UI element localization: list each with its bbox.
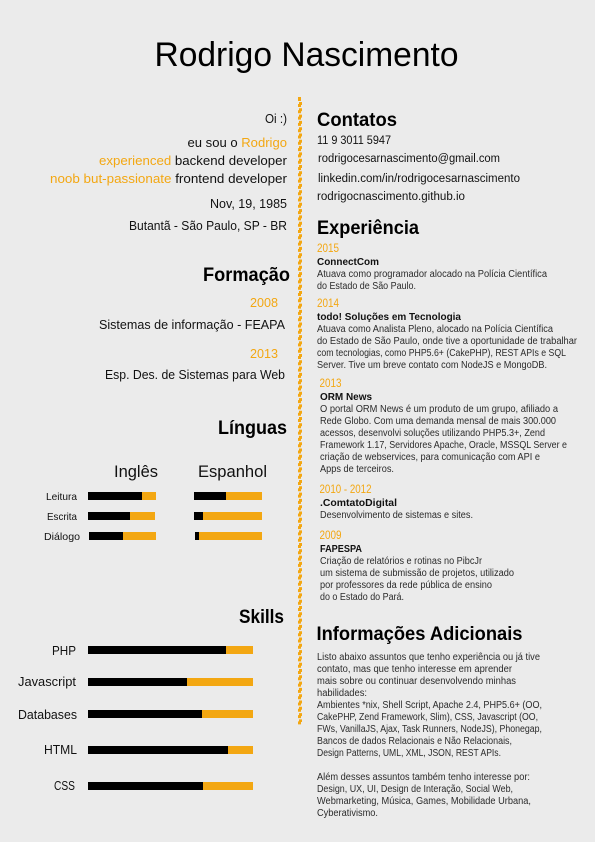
panel: informações adicionais: Cyberativismo. — [317, 808, 378, 819]
panel: informações adicionais: Listo abaixo assuntos que tenho experiência ou já tive — [317, 652, 540, 663]
job: FAPESPA: FAPESPA — [320, 543, 362, 555]
job: ORM News: Rede Globo. Com uma demanda mensal de mais 300.000 — [320, 416, 556, 427]
panel: intro — [50, 111, 288, 233]
job: FAPESPA: por professores da rede pública de ensino — [320, 580, 492, 591]
panel: intro: eu sou o Rodrigo — [188, 135, 287, 150]
panel: contatos: rodrigocesarnascimento@gmail.com — [318, 153, 500, 165]
panel: informações adicionais: Webmarketing, Música, Games, Mobilidade Urbana, — [317, 796, 531, 807]
job: ORM News: acessos, desenvolvi soluções utilizando PHP5.3+, Zend — [320, 428, 545, 439]
panel: informações adicionais: habilidades: — [317, 688, 367, 699]
job: .ComtatoDigital: 2010 - 2012 — [320, 484, 372, 496]
job: ORM News: 2013 — [320, 378, 342, 390]
panel: formação — [99, 264, 290, 382]
panel: contatos — [317, 109, 520, 203]
job: ConnectCom: Atuava como programador alocado na Polícia Científica — [317, 269, 547, 280]
bars: language levels — [88, 492, 262, 540]
job: FAPESPA: do o Estado do Pará. — [320, 592, 404, 603]
panel: informações adicionais: CakePHP, Zend Framework, Slim), CSS, Javascript (OO, — [317, 712, 538, 723]
panel: skills: Javascript — [18, 674, 76, 689]
panel: línguas: Inglês — [114, 462, 158, 481]
panel: línguas: Espanhol — [198, 462, 267, 481]
job: todo! Soluções em Tecnologia: Server. Tive um breve contato com NodeJS e MongoDB. — [317, 360, 547, 371]
panel: línguas: Leitura — [46, 491, 77, 503]
panel: intro: noob but-passionate frontend developer — [50, 171, 288, 186]
panel: línguas: Línguas — [218, 417, 287, 439]
job: FAPESPA: um sistema de submissão de projetos, utilizado — [320, 568, 514, 579]
dotted vertical divider — [300, 97, 301, 725]
panel: experiência: Experiência — [317, 217, 419, 239]
panel: informações adicionais — [316, 623, 542, 819]
job: todo! Soluções em Tecnologia: Atuava como Analista Pleno, alocado na Polícia Científica — [317, 324, 553, 335]
job: todo! Soluções em Tecnologia — [317, 298, 578, 371]
panel: intro: Oi :) — [265, 111, 287, 126]
panel: contatos: Contatos — [317, 109, 397, 131]
job: ORM News: O portal ORM News é um produto de um grupo, afiliado a — [320, 404, 558, 415]
panel: skills: Skills — [239, 606, 284, 628]
job: ConnectCom: ConnectCom — [317, 256, 379, 268]
job: FAPESPA: 2009 — [320, 530, 342, 542]
panel: formação: 2008 — [250, 295, 278, 310]
job: todo! Soluções em Tecnologia: do Estado de São Paulo, onde tive a oportunidade de trabalhar — [317, 336, 578, 347]
panel: informações adicionais: Design Patterns, UML, XML, JSON, REST APIs. — [317, 748, 501, 759]
panel: skills: CSS — [54, 778, 75, 793]
job: .ComtatoDigital — [320, 484, 473, 521]
job: FAPESPA: Criação de relatórios e rotinas no PibcJr — [320, 556, 483, 567]
panel: formação: Formação — [203, 264, 290, 286]
job: ConnectCom: do Estado de São Paulo. — [317, 281, 416, 292]
panel: intro: Butantã - São Paulo, SP - BR — [129, 218, 287, 233]
job: ORM News: Framework 1.17, Servidores Apache, Oracle, MSSQL Server e — [320, 440, 567, 451]
panel: skills: Databases — [18, 707, 77, 722]
panel: informações adicionais: Ambientes *nix, Shell Script, Apache 2.4, PHP5.6+ (OO, — [317, 700, 542, 711]
job: ORM News — [320, 378, 567, 475]
job: todo! Soluções em Tecnologia: 2014 — [317, 298, 340, 310]
panel: contatos: linkedin.com/in/rodrigocesarnascimento — [318, 173, 520, 185]
job: ConnectCom — [317, 243, 547, 292]
job: ORM News: ORM News — [320, 391, 372, 403]
panel: formação: Esp. Des. de Sistemas para Web — [105, 367, 285, 382]
panel: formação: 2013 — [250, 346, 278, 361]
panel: contatos: 11 9 3011 5947 — [317, 135, 391, 147]
job: .ComtatoDigital: .ComtatoDigital — [320, 497, 397, 509]
panel: formação: Sistemas de informação - FEAPA — [99, 317, 285, 332]
job: ORM News: Apps de terceiros. — [320, 464, 394, 475]
panel: informações adicionais: mais sobre ou continuar desenvolvendo minhas — [317, 676, 516, 687]
panel: skills — [18, 606, 284, 793]
job: .ComtatoDigital: Desenvolvimento de sistemas e sites. — [320, 510, 473, 521]
panel: línguas: Diálogo — [44, 531, 80, 543]
job: ConnectCom: 2015 — [317, 243, 339, 255]
panel: informações adicionais: contato, mas que tenho interesse em aprender — [317, 664, 513, 675]
job: FAPESPA — [320, 530, 514, 603]
panel: informações adicionais: Informações Adicionais — [316, 623, 523, 645]
title: Rodrigo Nascimento — [154, 36, 458, 74]
panel: skills: PHP — [52, 643, 76, 658]
panel: skills: HTML — [44, 742, 77, 757]
panel: línguas — [44, 417, 287, 543]
job: ORM News: criação de webservices, para comunicação com API e — [320, 452, 540, 463]
panel: contatos: rodrigocnascimento.github.io — [317, 191, 465, 203]
job: todo! Soluções em Tecnologia: com tecnologias, como PHP5.6+ (CakePHP), REST APIs e SQL — [317, 348, 566, 359]
panel: informações adicionais: Além desses assuntos também tenho interesse por: — [317, 772, 530, 783]
panel: informações adicionais: FWs, VanillaJS, Ajax, Task Runners, NodeJS), Phonegap, — [317, 724, 542, 735]
panel: línguas: Escrita — [47, 511, 77, 523]
panel: experiência — [317, 217, 578, 603]
bars: skill levels — [88, 646, 253, 790]
job: todo! Soluções em Tecnologia: todo! Soluções em Tecnologia — [317, 311, 461, 323]
panel: intro: experienced backend developer — [99, 153, 288, 168]
panel: informações adicionais: Design, UX, UI, Design de Interação, Social Web, — [317, 784, 513, 795]
panel: intro: Nov, 19, 1985 — [210, 196, 287, 211]
panel: informações adicionais: Bancos de dados Relacionais e Não Relacionais, — [317, 736, 512, 747]
